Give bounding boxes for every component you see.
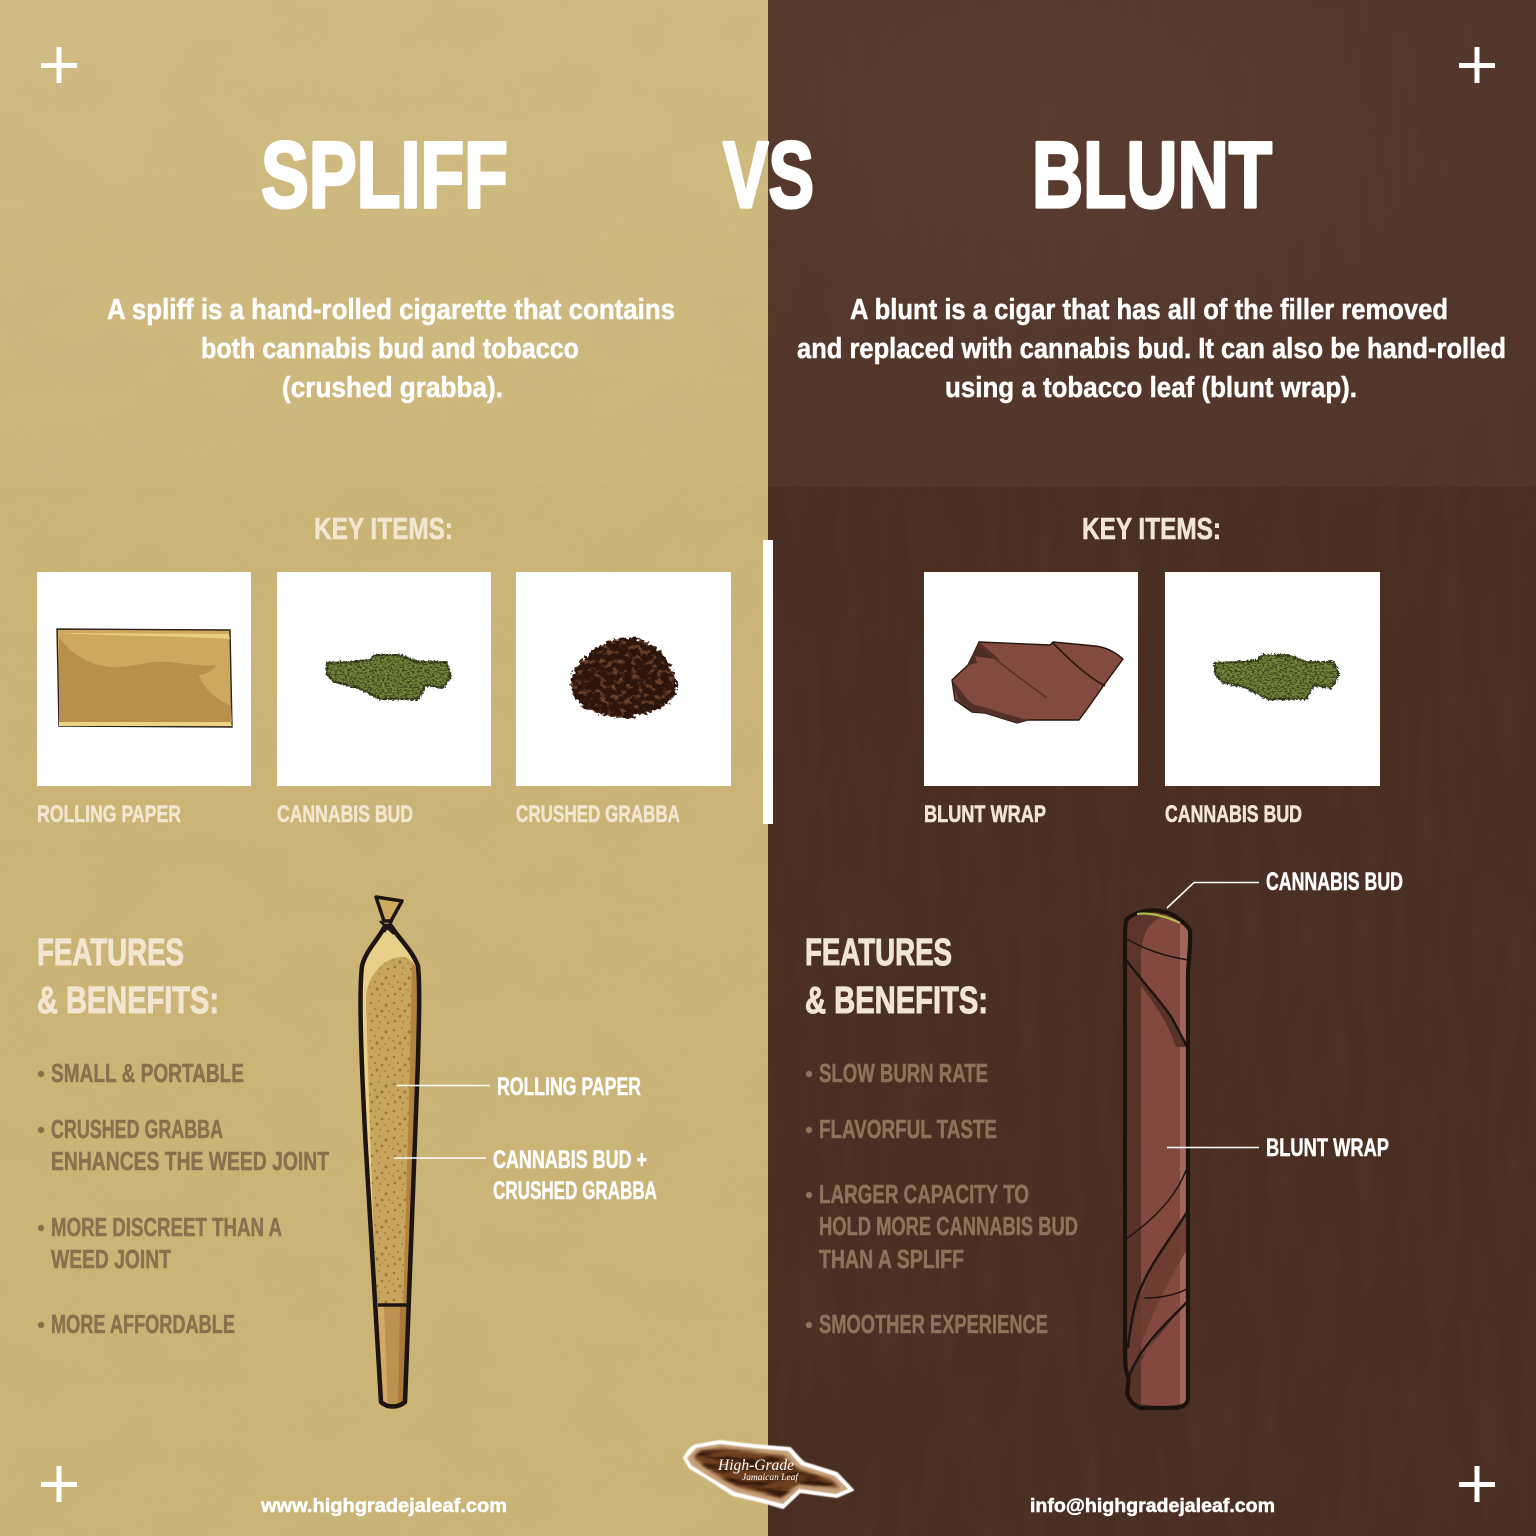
heading: blunt features and benefits: & BENEFITS: (805, 980, 988, 1022)
callout: rolling paper: ROLLING PAPER (497, 1073, 641, 1101)
list: spliff benefits: WEED JOINT (51, 1244, 171, 1274)
heading: spliff features and benefits (37, 932, 219, 1022)
icon: crushed grabba (571, 638, 677, 718)
callout: cannabis bud + crushed grabba: CANNABIS BUD + (493, 1146, 647, 1174)
text: spliff description: A spliff is a hand-rolled cigarette that contains (107, 294, 675, 326)
label: cannabis bud: CANNABIS BUD (277, 801, 413, 828)
list: spliff benefits: ENHANCES THE WEED JOINT (51, 1146, 329, 1176)
list: spliff benefits (38, 1058, 329, 1339)
callout: cannabis bud + crushed grabba (394, 1146, 657, 1205)
icon: cannabis bud (1215, 655, 1339, 699)
card: blunt wrap (924, 572, 1138, 786)
card: cannabis bud (277, 572, 491, 786)
illustration: spliff (355, 897, 425, 1410)
list: spliff benefits: MORE DISCREET THAN A (51, 1212, 282, 1242)
text: spliff description: both cannabis bud and tobacco (201, 333, 579, 365)
icon: blunt wrap (952, 642, 1123, 723)
list: blunt benefits: FLAVORFUL TASTE (819, 1114, 997, 1144)
title: vs: VS (723, 122, 814, 227)
illustration: blunt (1120, 905, 1195, 1415)
heading: key items spliff: KEY ITEMS: (314, 511, 453, 546)
panel: spliff background (0, 0, 768, 1536)
text: spliff description: (crushed grabba). (282, 372, 503, 404)
icon: plus bottom left (41, 1466, 77, 1502)
icon: plus bottom right (1459, 1466, 1495, 1502)
footer: email: info@highgradejaleaf.com (1030, 1496, 1275, 1517)
logo: high-grade jamaican leaf (684, 1441, 853, 1508)
list: blunt benefits: THAN A SPLIFF (819, 1244, 964, 1274)
title: spliff: SPLIFF (261, 122, 508, 227)
text: blunt description: A blunt is a cigar that has all of the filler removed (850, 294, 1448, 326)
logo: high-grade jamaican leaf: High-Grade (717, 1457, 794, 1474)
list: blunt benefits: SMOOTHER EXPERIENCE (819, 1309, 1048, 1339)
card: crushed grabba (516, 572, 731, 786)
icon: cannabis bud (327, 655, 451, 699)
list: spliff benefits: CRUSHED GRABBA (51, 1114, 223, 1144)
text: blunt description: using a tobacco leaf (blunt wrap). (945, 372, 1357, 404)
heading: key items blunt: KEY ITEMS: (1082, 511, 1221, 546)
card: rolling paper (37, 572, 251, 786)
text: blunt description (797, 294, 1506, 404)
icon: plus top left (41, 47, 77, 83)
label: rolling paper: ROLLING PAPER (37, 801, 181, 828)
text: spliff description (107, 294, 675, 404)
icon: rolling paper (57, 629, 232, 727)
title: blunt: BLUNT (1032, 122, 1272, 227)
heading: blunt features and benefits: FEATURES (805, 932, 952, 974)
card: cannabis bud (1165, 572, 1380, 786)
list: spliff benefits: SMALL & PORTABLE (51, 1058, 244, 1088)
label: blunt wrap: BLUNT WRAP (924, 801, 1046, 828)
divider (763, 540, 773, 824)
heading: blunt features and benefits (805, 932, 988, 1022)
callout: cannabis bud: CANNABIS BUD (1266, 868, 1403, 896)
heading: spliff features and benefits: & BENEFITS: (37, 980, 219, 1022)
list: blunt benefits (806, 1058, 1078, 1339)
footer: website: www.highgradejaleaf.com (260, 1496, 507, 1517)
icon: plus top right (1459, 47, 1495, 83)
list: blunt benefits: LARGER CAPACITY TO (819, 1179, 1029, 1209)
logo: high-grade jamaican leaf: Jamaican Leaf (742, 1472, 800, 1482)
callout: blunt wrap: BLUNT WRAP (1266, 1134, 1389, 1162)
list: spliff benefits: MORE AFFORDABLE (51, 1309, 235, 1339)
heading: spliff features and benefits: FEATURES (37, 932, 184, 974)
callout: cannabis bud + crushed grabba: CRUSHED GRABBA (493, 1177, 657, 1205)
label: cannabis bud: CANNABIS BUD (1165, 801, 1302, 828)
label: crushed grabba: CRUSHED GRABBA (516, 801, 680, 828)
panel: blunt background (768, 0, 1536, 1536)
list: blunt benefits: SLOW BURN RATE (819, 1058, 988, 1088)
list: blunt benefits: HOLD MORE CANNABIS BUD (819, 1211, 1078, 1241)
callout: cannabis bud (1167, 868, 1403, 908)
